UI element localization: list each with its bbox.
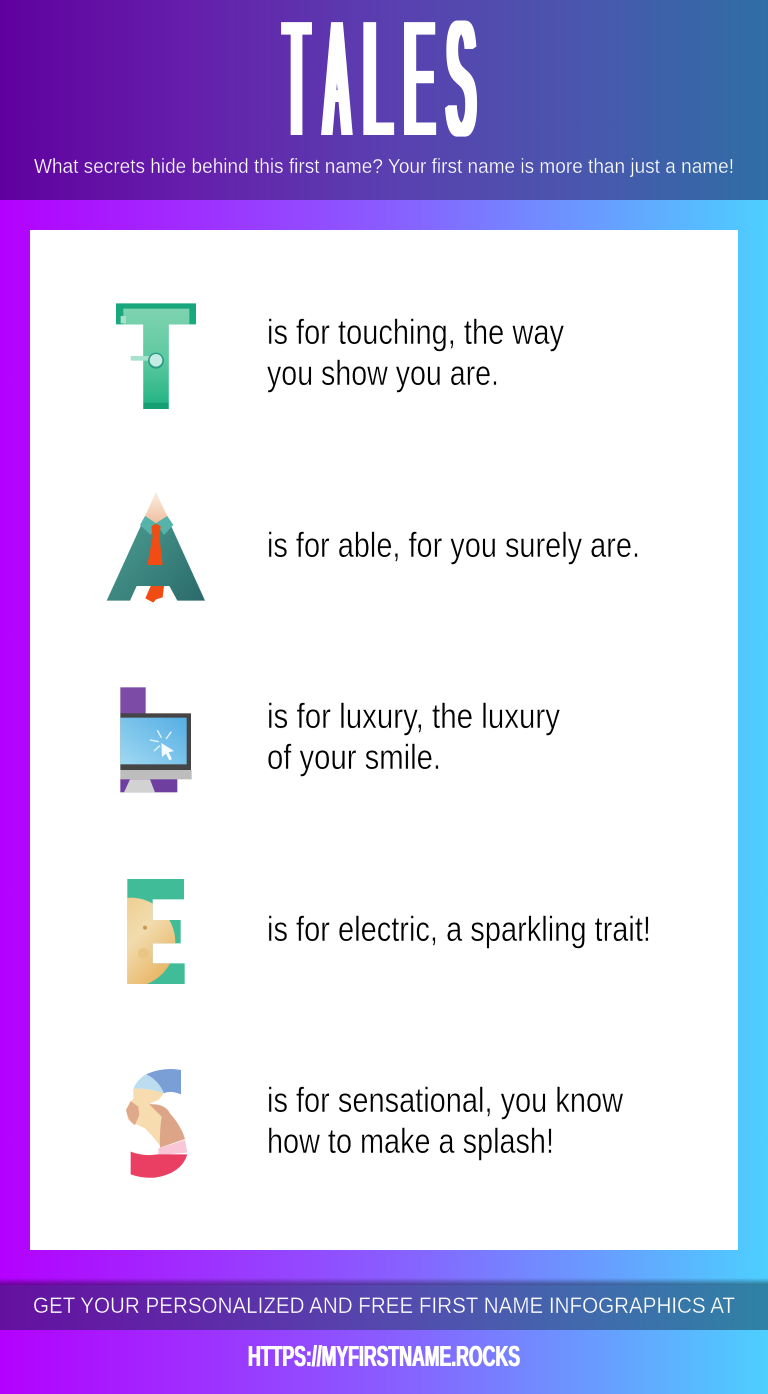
text: A line: is for able, for you surely are. (267, 526, 640, 565)
text: S line: how to make a splash! (267, 1122, 554, 1161)
text: E line: is for electric, a sparkling trait! (267, 910, 651, 949)
panel: white letters card (30, 230, 738, 1250)
text: T line: is for touching, the way (267, 313, 564, 352)
text: S line: is for sensational, you know (267, 1081, 624, 1120)
subtitle: What secrets hide behind this first name? Your first name is more than just a name! (34, 156, 734, 178)
icon: letter L computer monitor (120, 687, 192, 792)
text: S line (267, 1081, 624, 1161)
header band (0, 0, 768, 200)
text: T line: you show you are. (267, 354, 499, 393)
text: L line: of your smile. (267, 738, 441, 777)
icon: letter S handshake (126, 1069, 187, 1178)
icon: letter A suit and tie (107, 493, 205, 603)
footer url: HTTPS://MYFIRSTNAME.ROCKS (248, 1341, 520, 1373)
footer band (0, 1278, 768, 1330)
text: T line (267, 313, 564, 393)
text: L line (267, 697, 560, 777)
text: L line: is for luxury, the luxury (267, 697, 560, 736)
icon: letter E moon (127, 879, 185, 984)
icon: letter T door (116, 303, 196, 409)
title (284, 0, 475, 171)
footer call to action: GET YOUR PERSONALIZED AND FREE FIRST NAME INFOGRAPHICS AT (33, 1293, 735, 1318)
